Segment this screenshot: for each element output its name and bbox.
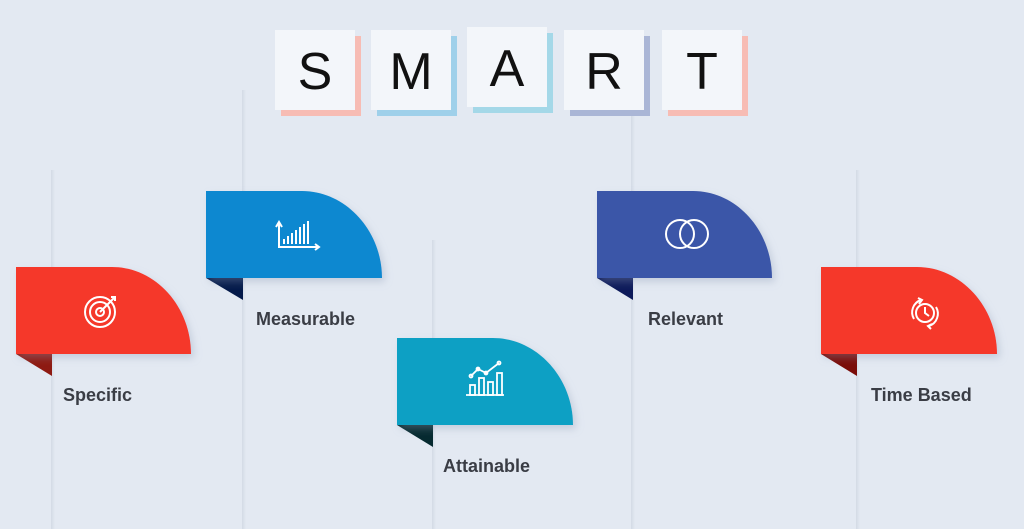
card: Measurable: Measurable	[256, 309, 355, 329]
card: Attainable: Attainable	[443, 456, 530, 476]
icon: target	[85, 297, 115, 327]
icon: clock with arrows	[912, 298, 938, 329]
card: Attainable	[397, 338, 573, 476]
title: SMART letter boxes	[275, 27, 748, 116]
card: Relevant	[597, 191, 772, 329]
decorative vertical panel lines	[51, 170, 55, 529]
icon: overlapping circles	[666, 220, 708, 248]
card: Relevant: Relevant	[648, 309, 723, 329]
card: Specific	[16, 267, 191, 405]
icon: bar chart	[276, 221, 319, 250]
card: Measurable	[206, 191, 382, 329]
card: Specific: Specific	[63, 385, 132, 405]
title: SMART letter boxes: R	[585, 43, 623, 101]
title: SMART letter boxes: M	[389, 43, 433, 101]
card: Time Based	[821, 267, 997, 405]
title: SMART letter boxes: A	[490, 40, 525, 98]
card: Time Based: Time Based	[871, 385, 972, 405]
title: SMART letter boxes: S	[298, 43, 332, 101]
title: SMART letter boxes: T	[686, 43, 718, 101]
icon: growth chart	[466, 362, 504, 395]
